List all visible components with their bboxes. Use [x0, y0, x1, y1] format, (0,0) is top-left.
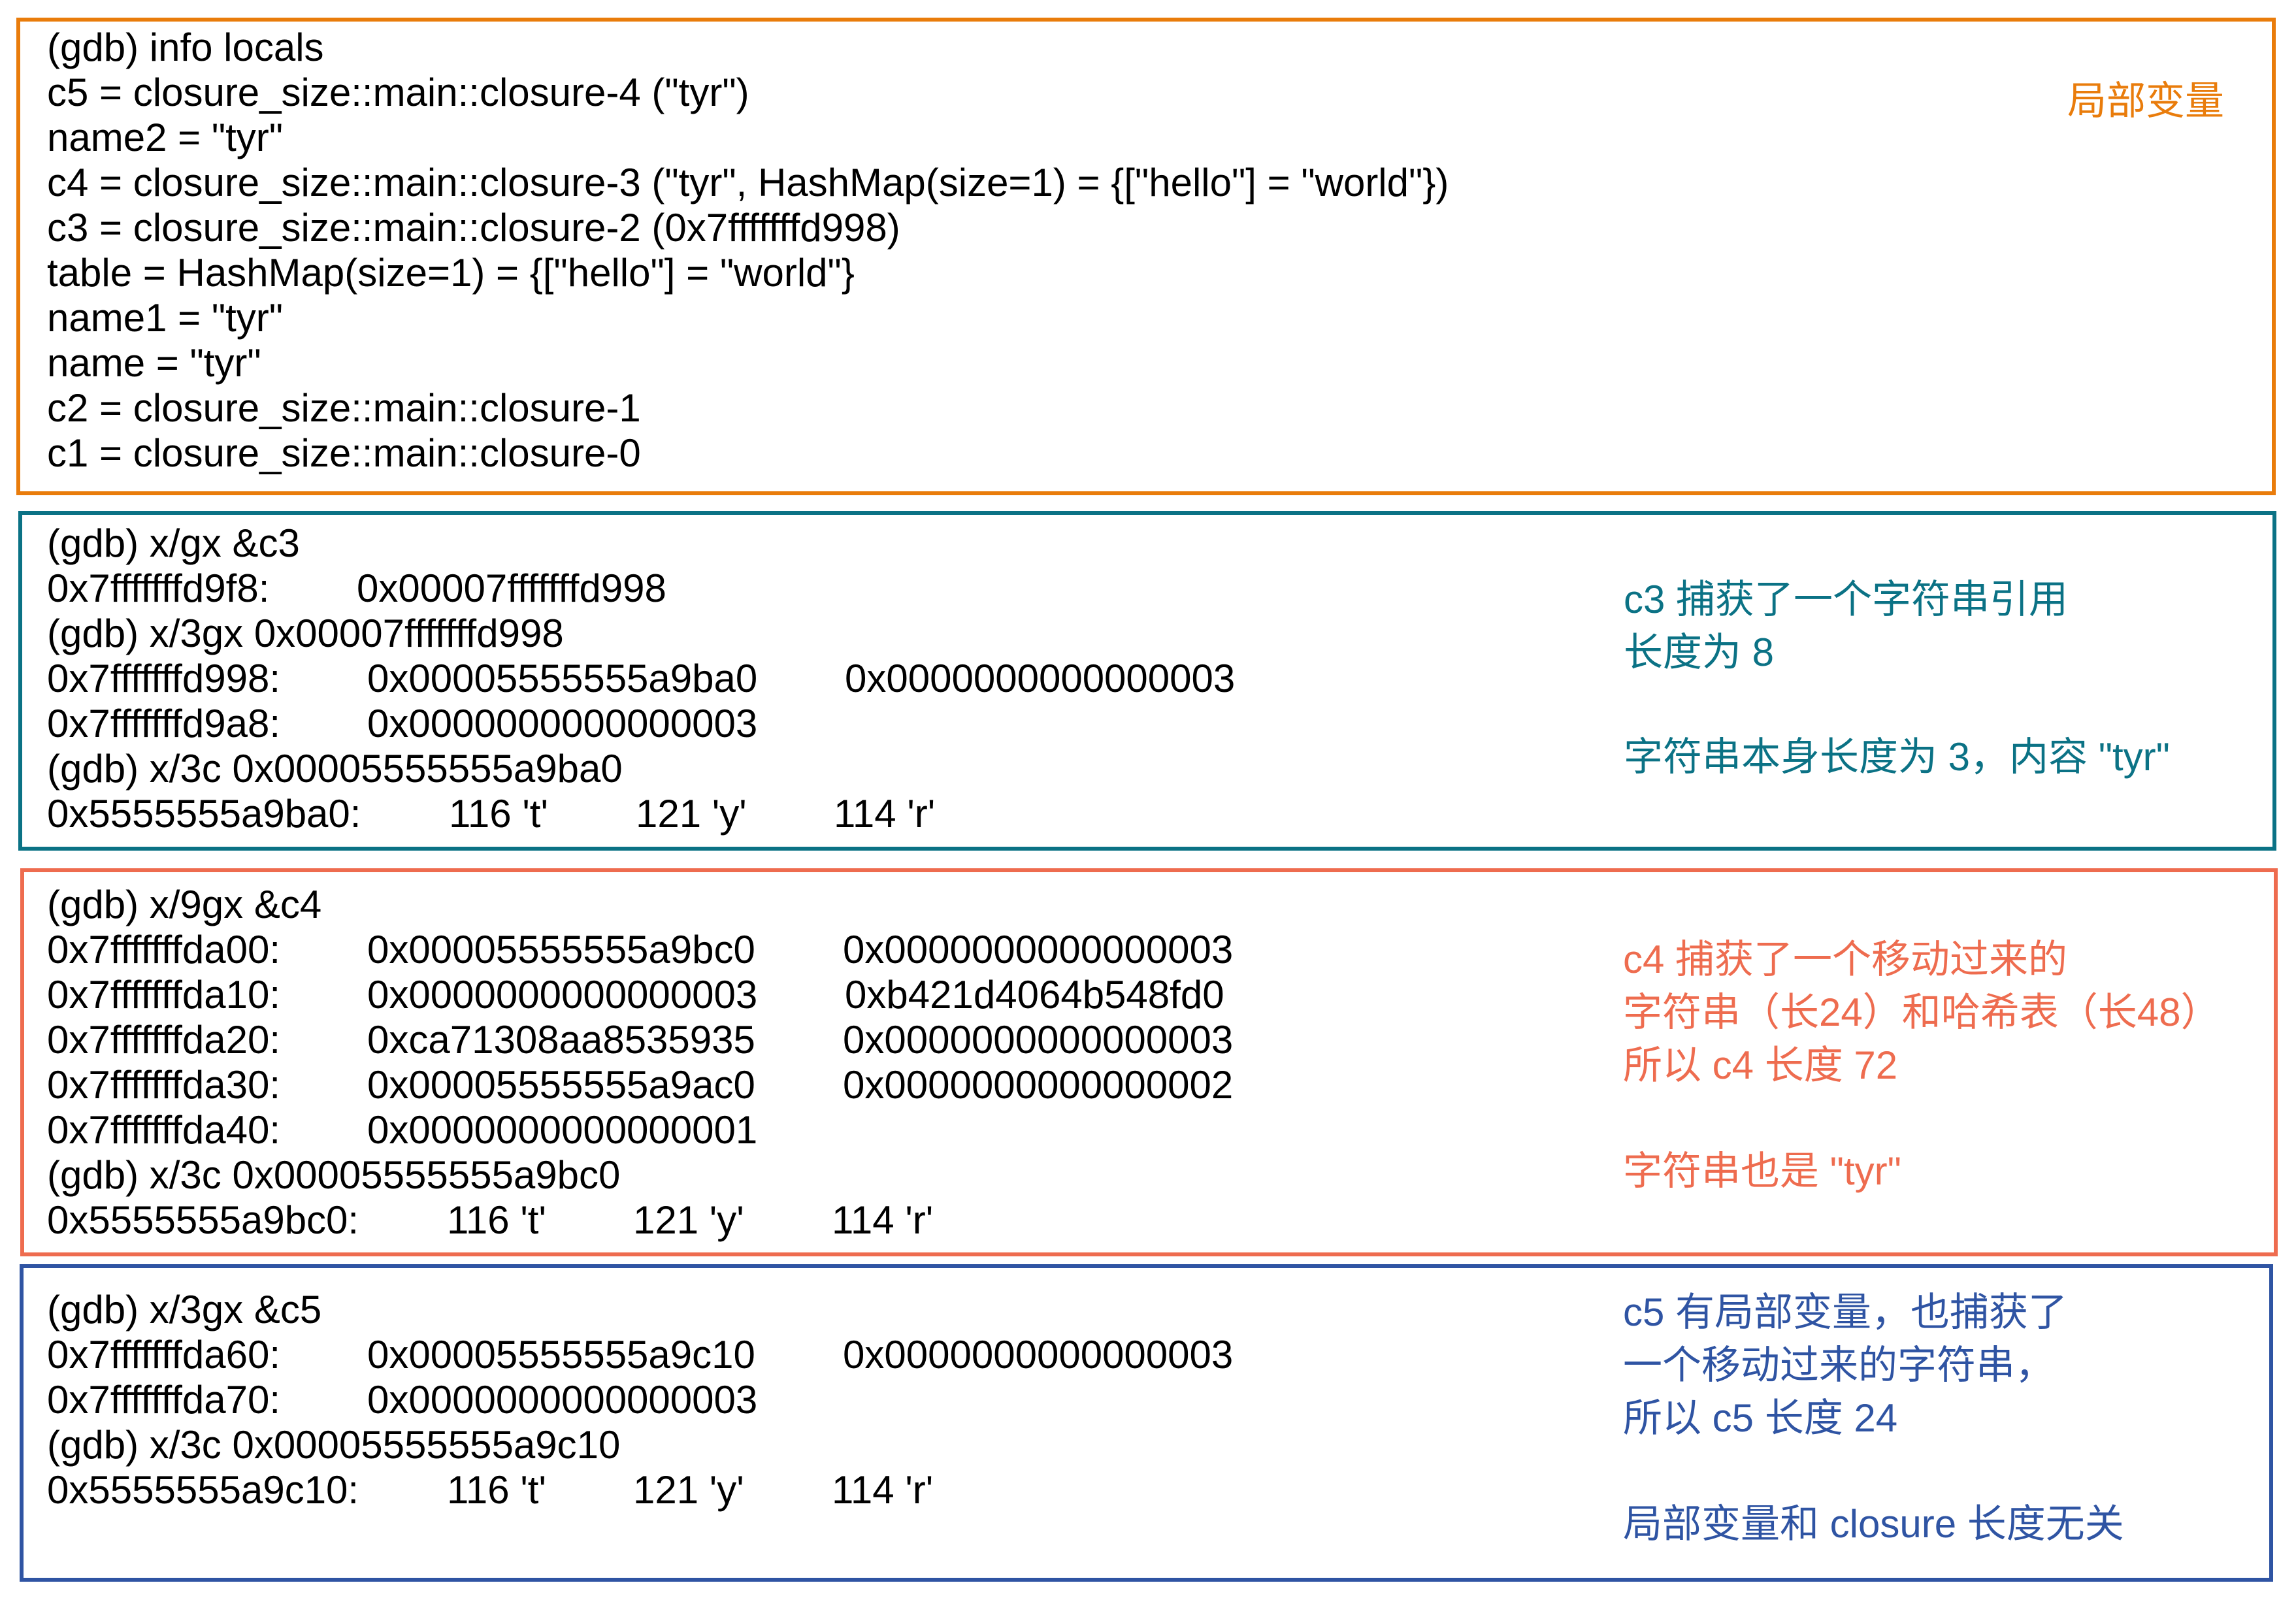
annotation: c5 explanation: 一个移动过来的字符串，	[1623, 1343, 2054, 1387]
gdb output: c4: (gdb) x/3c 0x00005555555a9bc0	[47, 1153, 620, 1197]
gdb output: local variables: c4 = closure_size::main::closure-3 ("tyr", HashMap(size=1) = {["hello"] = "world"})	[47, 161, 1449, 204]
gdb output: c4: 0x7fffffffda00:	[47, 928, 280, 971]
gdb output: c3: 0x00005555555a9ba0	[367, 657, 757, 700]
gdb output: c3: 0x0000000000000003	[845, 657, 1235, 700]
gdb output: c3: (gdb) x/3gx 0x00007fffffffd998	[47, 612, 564, 655]
gdb output: c3	[47, 521, 1235, 836]
gdb output: c4: 121 'y'	[633, 1198, 744, 1242]
gdb output: local variables: c2 = closure_size::main::closure-1	[47, 386, 641, 430]
gdb output: c4: 0x7fffffffda40:	[47, 1108, 280, 1152]
gdb output: c4: (gdb) x/9gx &c4	[47, 883, 321, 926]
annotation: c3 explanation: 长度为 8	[1624, 630, 1774, 674]
gdb output: c3: 116 't'	[449, 792, 548, 836]
annotation: c3 explanation: 字符串本身长度为 3，内容 "tyr"	[1624, 735, 2170, 779]
annotation: c5 explanation	[1623, 1290, 2124, 1546]
gdb output: c5: (gdb) x/3c 0x00005555555a9c10	[47, 1423, 620, 1467]
gdb output: local variables: name2 = "tyr"	[47, 116, 283, 159]
annotation: c5 explanation: c5 有局部变量，也捕获了	[1623, 1290, 2067, 1334]
gdb output: local variables: name = "tyr"	[47, 341, 261, 385]
annotation: c5 explanation: 局部变量和 closure 长度无关	[1623, 1502, 2124, 1546]
gdb output: c5: 0x5555555a9c10:	[47, 1468, 359, 1512]
gdb output: c4: 0x7fffffffda20:	[47, 1018, 280, 1062]
gdb output: c4: 0x7fffffffda10:	[47, 973, 280, 1017]
annotation: c4 explanation	[1623, 938, 2220, 1193]
gdb output: c5: 0x0000000000000003	[367, 1378, 757, 1422]
panel: c3 memory	[20, 513, 2274, 849]
gdb output: c4	[47, 883, 1233, 1242]
gdb output: c4: 0x00005555555a9bc0	[367, 928, 755, 971]
annotation: c4 explanation: 字符串（长24）和哈希表（长48）	[1623, 990, 2220, 1034]
annotation: c4 explanation: 所以 c4 长度 72	[1623, 1043, 1897, 1087]
gdb output: c4: 0x0000000000000002	[843, 1063, 1233, 1107]
gdb output: c5: 114 'r'	[832, 1468, 933, 1512]
panel: c4 memory	[22, 870, 2276, 1254]
gdb output: c3: 0x5555555a9ba0:	[47, 792, 361, 836]
gdb output: local variables: (gdb) info locals	[47, 25, 324, 69]
annotation: c5 explanation: 所以 c5 长度 24	[1623, 1396, 1897, 1440]
gdb output: local variables: c5 = closure_size::main::closure-4 ("tyr")	[47, 71, 749, 114]
gdb output: c4: 116 't'	[447, 1198, 546, 1242]
gdb output: local variables: c3 = closure_size::main::closure-2 (0x7fffffffd998)	[47, 206, 900, 250]
annotation: c3 explanation	[1624, 578, 2170, 779]
gdb output: c3: (gdb) x/gx &c3	[47, 521, 300, 565]
gdb output: c3: 0x7fffffffd9a8:	[47, 702, 280, 745]
gdb output: c4: 114 'r'	[832, 1198, 933, 1242]
gdb output: c3: 0x7fffffffd9f8:	[47, 566, 269, 610]
gdb output: local variables: table = HashMap(size=1) = {["hello"] = "world"}	[47, 251, 855, 295]
annotation: c3 explanation: c3 捕获了一个字符串引用	[1624, 578, 2068, 621]
annotation: c4 explanation: 字符串也是 "tyr"	[1623, 1149, 1901, 1193]
gdb output: c3: 0x7fffffffd998:	[47, 657, 280, 700]
gdb output: c4: 0x5555555a9bc0:	[47, 1198, 359, 1242]
panel: info locals	[18, 20, 2274, 493]
gdb output: c5: 0x7fffffffda70:	[47, 1378, 280, 1422]
gdb output: local variables: name1 = "tyr"	[47, 296, 283, 340]
annotation: local variables: 局部变量	[2067, 79, 2224, 123]
gdb output: c4: 0xb421d4064b548fd0	[845, 973, 1224, 1017]
gdb output: c3: (gdb) x/3c 0x00005555555a9ba0	[47, 747, 623, 791]
panel border: coral	[22, 870, 2276, 1254]
gdb output: c3: 121 'y'	[636, 792, 747, 836]
gdb output: c4: 0x0000000000000003	[367, 973, 757, 1017]
gdb output: c4: 0x0000000000000003	[843, 928, 1233, 971]
gdb output: c4: 0x0000000000000003	[843, 1018, 1233, 1062]
gdb output: c4: 0x7fffffffda30:	[47, 1063, 280, 1107]
panel border: teal	[20, 513, 2274, 849]
gdb output: c5: 0x7fffffffda60:	[47, 1333, 280, 1377]
panel border: blue	[22, 1266, 2271, 1580]
gdb output: c4: 0x00005555555a9ac0	[367, 1063, 755, 1107]
gdb output: c3: 0x0000000000000003	[367, 702, 757, 745]
gdb output: c5: 116 't'	[447, 1468, 546, 1512]
gdb output: local variables	[47, 25, 1449, 475]
annotation: c4 explanation: c4 捕获了一个移动过来的	[1623, 938, 2067, 981]
gdb output: c5: 121 'y'	[633, 1468, 744, 1512]
panel: c5 memory	[22, 1266, 2271, 1580]
panel border: orange	[18, 20, 2274, 493]
gdb output: c5: (gdb) x/3gx &c5	[47, 1288, 321, 1331]
gdb output: c4: 0xca71308aa8535935	[367, 1018, 755, 1062]
gdb output: c3: 114 'r'	[834, 792, 935, 836]
gdb output: local variables: c1 = closure_size::main::closure-0	[47, 431, 641, 475]
gdb output: c5: 0x00005555555a9c10	[367, 1333, 755, 1377]
gdb output: c5: 0x0000000000000003	[843, 1333, 1233, 1377]
gdb output: c3: 0x00007fffffffd998	[357, 566, 666, 610]
gdb output: c5	[47, 1288, 1233, 1512]
gdb output: c4: 0x0000000000000001	[367, 1108, 757, 1152]
